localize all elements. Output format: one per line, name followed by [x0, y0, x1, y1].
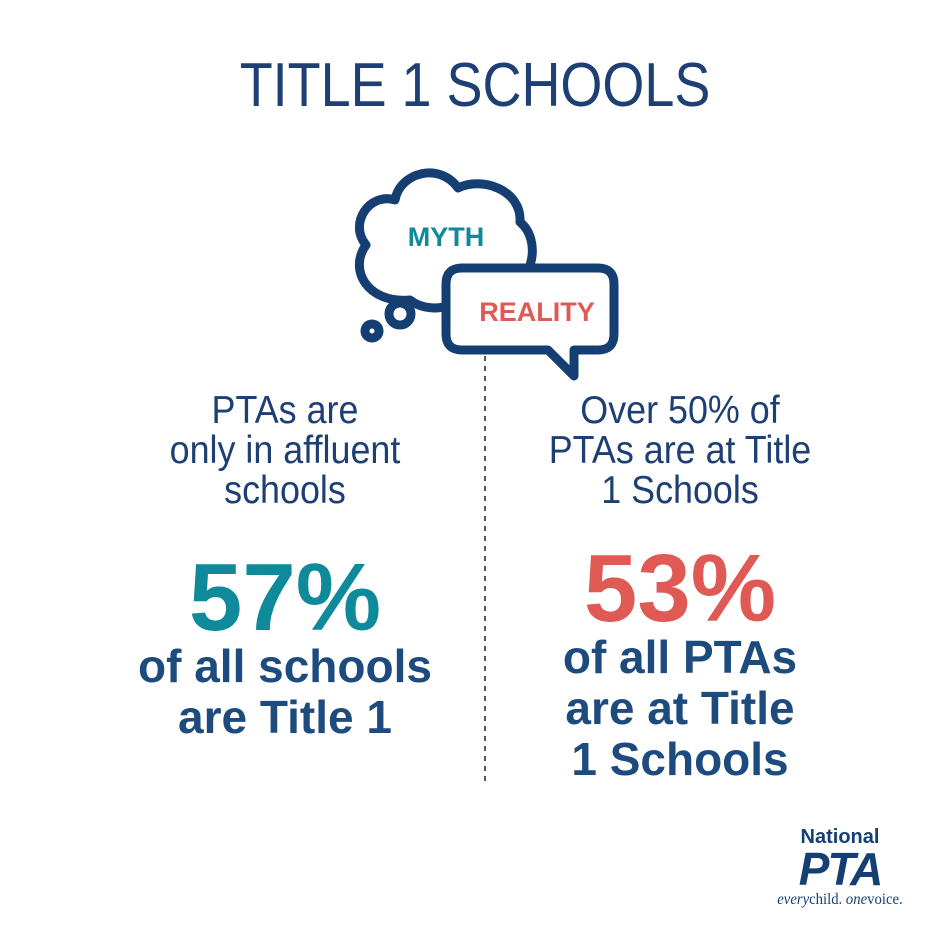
- title: TITLE 1 SCHOOLS: [240, 51, 710, 120]
- myth stat: [138, 544, 432, 743]
- reality statement: [549, 389, 811, 512]
- myth stat: are Title 1: [178, 691, 392, 743]
- myth statement: only in affluent: [170, 429, 400, 472]
- logo: PTA: [799, 843, 881, 895]
- reality stat: of all PTAs: [563, 631, 797, 683]
- myth statement: PTAs are: [212, 389, 358, 432]
- reality statement: PTAs are at Title: [549, 429, 811, 472]
- myth statement: schools: [224, 469, 346, 512]
- reality stat: are at Title: [565, 682, 795, 734]
- reality statement: 1 Schools: [601, 469, 759, 512]
- logo: National: [801, 826, 879, 848]
- logo: everychild. onevoice.: [777, 891, 903, 908]
- reality statement: Over 50% of: [580, 389, 780, 432]
- logo: [777, 826, 903, 908]
- icon: myth cloud and reality bubble: MYTH: [408, 222, 484, 252]
- reality stat: 1 Schools: [571, 733, 789, 785]
- myth stat: 57%: [189, 544, 381, 651]
- reality stat: [563, 535, 797, 785]
- myth statement: [170, 389, 400, 512]
- icon: myth cloud and reality bubble: REALITY: [479, 297, 595, 327]
- reality stat: 53%: [584, 535, 776, 642]
- myth stat: of all schools: [138, 640, 432, 692]
